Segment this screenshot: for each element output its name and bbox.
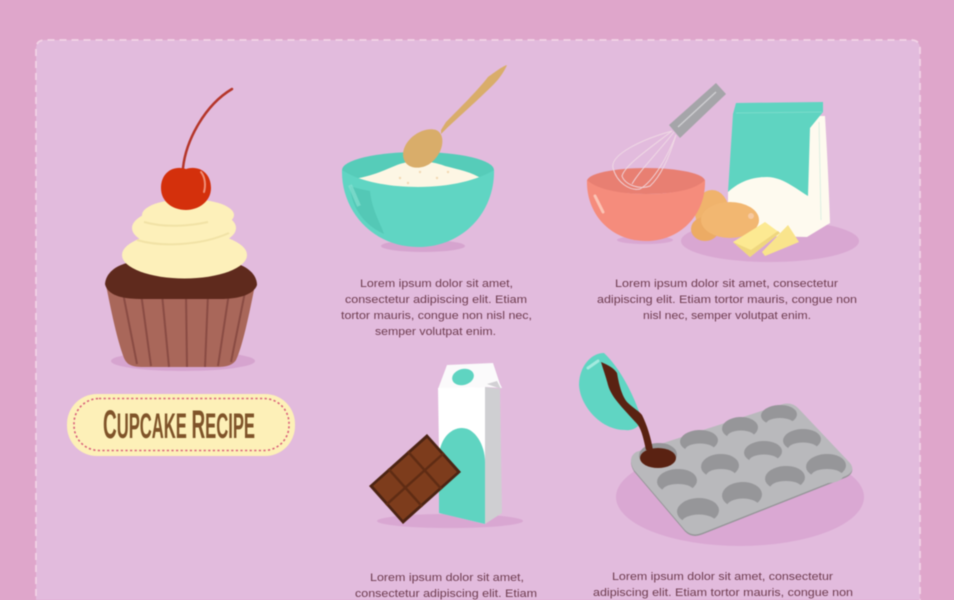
batter stream (601, 362, 653, 450)
coral bowl (587, 168, 705, 194)
text: step one: tortor mauris, congue non nisl nec, (341, 310, 532, 322)
text: step four: Lorem ipsum dolor sit amet, consectetur (612, 571, 833, 583)
title badge: Cupcake Recipe (67, 394, 295, 456)
butter (762, 225, 799, 256)
icon: coral bowl, whisk, flour, eggs and butter (587, 83, 859, 262)
text: step four: adipiscing elit. Etiam tortor mauris, congue non (593, 587, 853, 599)
text: step two: Lorem ipsum dolor sit amet, consectetur (615, 278, 838, 290)
title badge: Cupcake Recipe: CUPCAKE RECIPE (103, 403, 255, 447)
eggs (695, 190, 729, 234)
text: step three (355, 572, 537, 600)
text: step one: Lorem ipsum dolor sit amet, (360, 278, 513, 290)
text: step one: semper volutpat enim. (375, 326, 496, 338)
icon: teal bowl with spoon (342, 65, 507, 252)
text: step one (341, 278, 532, 338)
muffin wells (656, 404, 847, 530)
text: step two: nisl nec, semper volutpat enim. (643, 310, 811, 322)
chocolate bar (369, 434, 461, 524)
text: step three: consectetur adipiscing elit. Etiam (355, 588, 537, 600)
tilted teal bowl (579, 353, 642, 430)
text: step one: consectetur adipiscing elit. Etiam (345, 294, 527, 306)
icon: cupcake with cherry (105, 89, 257, 371)
text: step three: Lorem ipsum dolor sit amet, (370, 572, 524, 584)
icon: batter poured into muffin tray (579, 353, 864, 546)
text: step two: adipiscing elit. Etiam tortor mauris, congue non (597, 294, 857, 306)
icon: milk carton and chocolate bar (369, 363, 523, 528)
flour bag (728, 116, 830, 237)
text: step two (597, 278, 857, 322)
text: step four (593, 571, 853, 599)
whisk (669, 83, 726, 138)
